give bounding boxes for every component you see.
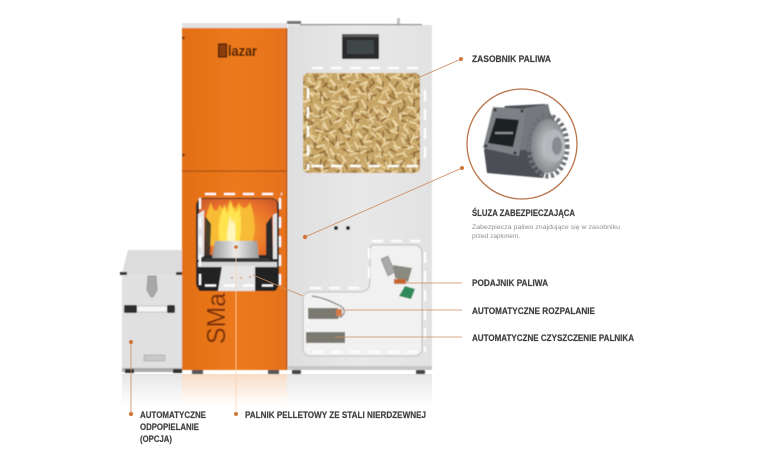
label: automatic ash removal: ODPOPIELANIE [140,422,199,432]
grey casing [287,18,432,374]
model name: SMa [201,292,231,344]
orange casing [182,23,288,374]
burner cleaner [306,332,345,343]
callout lines [129,57,464,416]
label: stainless steel burner: PALNIK PELLETOWY ZE STALI NIERDZEWNEJ [245,410,426,420]
brand logo: lazar [228,43,257,60]
ash box handle [124,305,175,313]
label: automatic ash removal: (OPCJA) [140,434,172,444]
icon: rotary valve [483,104,567,178]
pellet window [303,68,425,173]
lower service bay [303,241,425,356]
ash box [120,250,182,373]
label: automatic ash removal: AUTOMATYCZNE [140,410,206,420]
floor reflection [122,374,432,406]
text: safety valve description: Zabezpiecza paliwo znajdujące się w zasobniku [472,224,620,231]
heading: safety valve: ŚLUZA ZABEZPIECZAJĄCA [472,207,575,218]
boiler illustration [120,18,432,374]
igniter [308,296,344,319]
text: safety valve description: przed zapłonem. [472,233,520,240]
label: automatic burner cleaning: AUTOMATYCZNE CZYSZCZENIE PALNIKA [472,333,634,343]
ash box badge [144,355,165,361]
label: automatic ignition: AUTOMATYCZNE ROZPALANIE [472,306,595,316]
window dashes [205,193,282,195]
label: fuel hopper: ZASOBNIK PALIWA [472,54,551,64]
control screen [342,34,379,59]
fire window [196,194,282,291]
callout: rotary valve circle [467,89,577,199]
label: fuel feeder: PODAJNIK PALIWA [472,278,548,288]
ash box latch [147,276,157,297]
brand logo [218,43,257,60]
burner [198,241,277,291]
flames [205,200,255,246]
side shields [198,210,204,260]
fuel feeder [381,256,415,299]
